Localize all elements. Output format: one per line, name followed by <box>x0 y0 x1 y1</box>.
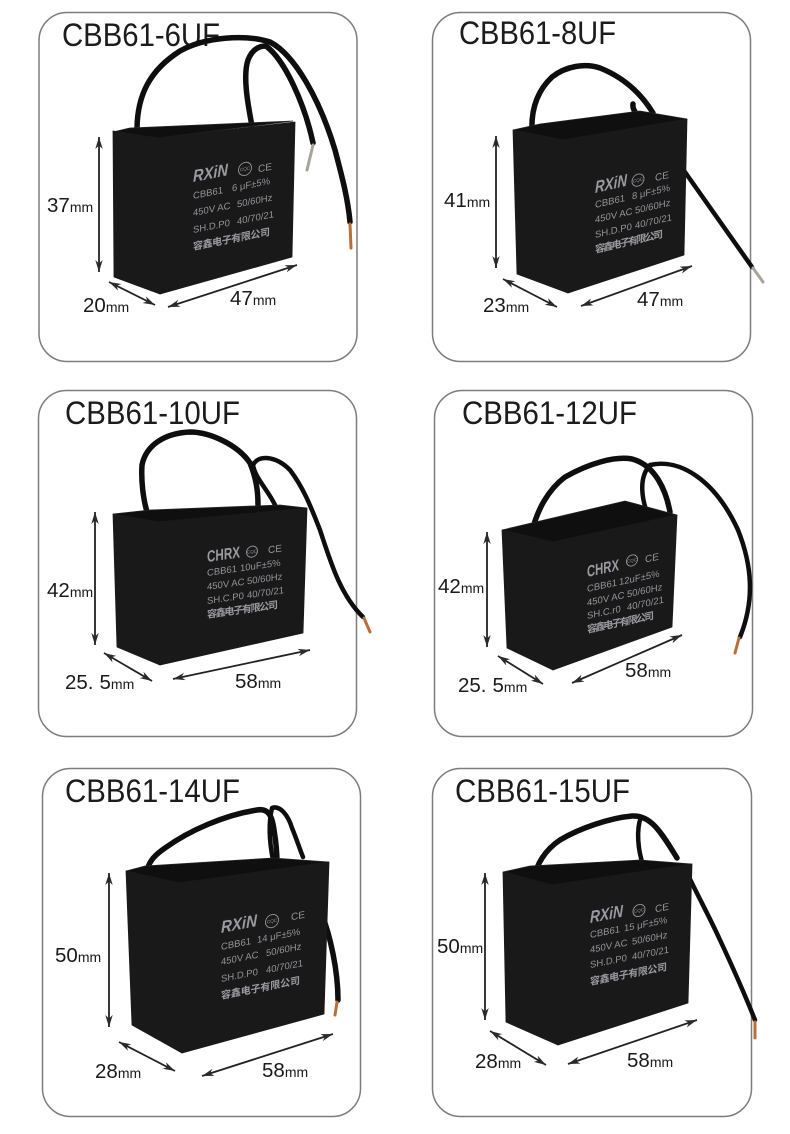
capacitor photo: 15uF: 40/70/21 <box>632 945 669 963</box>
capacitor photo: 14uF: 容鑫电子有限公司 <box>221 974 300 1002</box>
dimension: depth 25.5mm: 25. 5mm <box>458 674 527 697</box>
dimension: height 50mm: 50mm <box>437 935 483 958</box>
dimension: depth 20mm <box>83 282 155 317</box>
capacitor photo: 10uF: CBB61 <box>207 564 237 579</box>
dimension: depth 25.5mm <box>65 653 152 694</box>
capacitor photo: 15uF: 容鑫电子有限公司 <box>590 960 667 988</box>
capacitor photo: 14uF: 50/60Hz <box>266 941 302 959</box>
capacitor photo: 12uF: 容鑫电子有限公司 <box>587 609 654 636</box>
dimension: height 41mm <box>444 136 496 268</box>
capacitor photo: 10uF: 450V AC <box>207 577 245 593</box>
dimension: depth 23mm <box>483 279 557 317</box>
capacitor photo: 6uF: 450V AC <box>193 201 231 219</box>
dimension: height 42mm <box>438 532 487 647</box>
capacitor photo: 8uF: SH.D.P0 <box>595 222 632 241</box>
capacitor photo: 6uF: 40/70/21 <box>237 209 274 227</box>
capacitor photo: 6uF <box>113 38 351 294</box>
capacitor photo: 10uF: CQC <box>247 548 258 555</box>
capacitor photo: 14uF: 40/70/21 <box>266 958 303 976</box>
panel: CBB61-8UF <box>432 12 763 362</box>
capacitor photo: 15uF: 15 μF±5% <box>624 915 668 934</box>
panel: CBB61-6UF <box>39 12 357 362</box>
capacitor photo: 8uF: 50/60Hz <box>635 198 671 217</box>
dimension: width 58mm: 58mm <box>235 670 281 693</box>
capacitor photo: 14uF: SH.D.P0 <box>221 967 258 985</box>
capacitor photo: 6uF: 6 μF±5% <box>232 176 271 194</box>
dimension: height 42mm: 42mm <box>438 575 484 598</box>
dimension: width 58mm <box>202 1034 333 1082</box>
dimension: depth 25.5mm: 25. 5mm <box>65 671 134 694</box>
title: CBB61-15UF: CBB61-15UF <box>455 773 630 809</box>
capacitor photo: 10uF: 50/60Hz <box>247 571 283 587</box>
capacitor photo: 15uF: 50/60Hz <box>632 930 668 948</box>
capacitor photo: 12uF: CBB61 <box>587 578 617 595</box>
panel: CBB61-10UF <box>38 390 370 736</box>
capacitor photo: 14uF: CBB61 <box>221 936 251 953</box>
capacitor photo: 15uF: CQC <box>634 907 645 914</box>
capacitor photo: 15uF: SH.D.P0 <box>590 953 627 971</box>
dimension: height 37mm <box>47 137 99 272</box>
capacitor photo: 14uF: CE <box>291 910 305 923</box>
capacitor photo: 15uF <box>503 816 755 1045</box>
capacitor photo: 6uF: CQC <box>240 165 251 172</box>
capacitor photo: 8uF: 8 μF±5% <box>632 183 671 202</box>
dimension: depth 28mm: 28mm <box>475 1050 521 1073</box>
capacitor photo: 14uF: 14 μF±5% <box>257 927 301 946</box>
capacitor photo: 10uF <box>113 432 370 665</box>
dimension: height 42mm: 42mm <box>47 579 93 602</box>
dimension: depth 20mm: 20mm <box>83 294 129 317</box>
capacitor photo: 6uF: 容鑫电子有限公司 <box>193 225 270 253</box>
dimension: width 58mm: 58mm <box>262 1059 308 1082</box>
capacitor photo: 8uF: 40/70/21 <box>635 212 672 232</box>
capacitor photo: 15uF: CBB61 <box>590 924 620 941</box>
dimension: width 47mm: 47mm <box>637 288 683 311</box>
capacitor photo: 8uF <box>513 66 763 293</box>
dimension: width 58mm <box>568 1020 697 1072</box>
dimension: width 58mm <box>173 650 310 693</box>
capacitor photo: 14uF <box>126 807 338 1053</box>
panel: CBB61-15UF <box>432 768 755 1116</box>
capacitor photo: 15uF: 450V AC <box>590 938 628 956</box>
capacitor photo: 15uF: RXiN <box>590 901 623 927</box>
dimension: width 47mm <box>581 266 692 311</box>
title: CBB61-10UF: CBB61-10UF <box>65 395 240 431</box>
capacitor photo: 8uF: CE <box>655 170 669 184</box>
capacitor photo: 14uF: RXiN <box>221 910 258 937</box>
panel: CBB61-12UF <box>434 390 752 736</box>
capacitor photo: 6uF: SH.D.P0 <box>193 218 230 236</box>
capacitor photo: 6uF: CE <box>258 162 272 175</box>
title: CBB61-12UF: CBB61-12UF <box>462 395 637 431</box>
capacitor photo: 14uF: 450V AC <box>221 950 259 968</box>
dimension: height 37mm: 37mm <box>47 194 93 217</box>
dimension: width 47mm <box>168 265 297 310</box>
capacitor photo: 6uF: CBB61 <box>193 185 223 202</box>
capacitor photo: 12uF: 40/70/21 <box>627 595 664 613</box>
dimension: depth 23mm: 23mm <box>483 294 529 317</box>
capacitor photo: 12uF: CHRX <box>587 556 619 581</box>
capacitor photo: 12uF: CE <box>645 552 659 566</box>
dimension: height 41mm: 41mm <box>444 189 490 212</box>
capacitor photo: 10uF: 10uF±5% <box>240 558 281 574</box>
capacitor photo: 10uF: SH.C.P0 <box>207 591 244 607</box>
capacitor photo: 10uF: 40/70/21 <box>247 585 284 601</box>
title: CBB61-6UF: CBB61-6UF <box>62 17 220 53</box>
capacitor photo: 8uF: CBB61 <box>595 193 625 211</box>
capacitor photo: 8uF: RXiN <box>595 170 627 197</box>
dimension: width 58mm: 58mm <box>627 1049 673 1072</box>
capacitor photo: 12uF <box>502 458 750 670</box>
capacitor photo: 14uF: CQC <box>267 918 278 925</box>
capacitor photo: 6uF: 50/60Hz <box>237 193 273 210</box>
dimension: width 47mm: 47mm <box>230 287 276 310</box>
capacitor photo: 6uF: RXiN <box>193 159 229 186</box>
dimension: depth 28mm: 28mm <box>95 1060 141 1083</box>
capacitor photo: 8uF: 容鑫电子有限公司 <box>595 227 663 256</box>
dimension: height 50mm: 50mm <box>55 944 101 967</box>
capacitor photo: 12uF: SH.C.r0 <box>587 604 621 622</box>
capacitor photo: 12uF: 450V AC <box>587 590 625 609</box>
capacitor photo: 15uF: CE <box>655 902 669 915</box>
dimension: width 58mm: 58mm <box>625 659 671 682</box>
capacitor photo: 12uF: CQC <box>627 557 638 564</box>
panel: CBB61-14UF <box>42 768 360 1116</box>
capacitor photo: 8uF: 450V AC <box>595 206 632 226</box>
dimension: depth 28mm <box>475 1031 546 1073</box>
dimension: height 42mm <box>47 512 95 645</box>
dimension: width 58mm <box>572 635 682 683</box>
capacitor photo: 10uF: CHRX <box>207 543 240 566</box>
capacitor photo: 12uF: 50/60Hz <box>627 582 663 600</box>
capacitor photo: 8uF: CQC <box>633 176 644 184</box>
capacitor photo: 10uF: CE <box>268 543 282 556</box>
title: CBB61-14UF: CBB61-14UF <box>65 773 240 809</box>
dimension: depth 28mm <box>95 1042 175 1083</box>
dimension: depth 25.5mm <box>458 656 543 697</box>
capacitor photo: 10uF: 容鑫电子有限公司 <box>207 598 278 621</box>
capacitor photo: 12uF: 12uF±5% <box>619 569 660 588</box>
title: CBB61-8UF: CBB61-8UF <box>459 15 616 51</box>
